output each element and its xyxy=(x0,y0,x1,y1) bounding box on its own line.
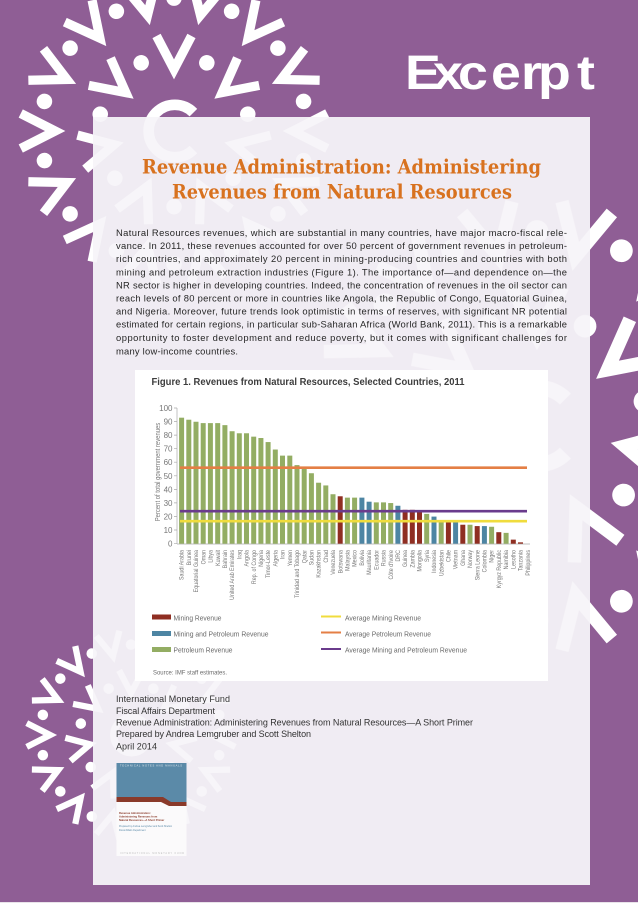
country labels: Malaysia xyxy=(344,549,352,571)
country labels: Guinea xyxy=(402,549,409,567)
bottom page edge xyxy=(0,902,638,903)
country labels: United Arab Emirates xyxy=(229,550,236,600)
country labels: Russia xyxy=(380,549,388,566)
country labels: Vietnam xyxy=(452,550,460,569)
panel: main content card xyxy=(93,117,590,885)
country labels: Mexico xyxy=(351,549,359,567)
legend: Source: IMF staff estimates. xyxy=(153,670,227,676)
country labels xyxy=(178,549,532,600)
y axis: 80 xyxy=(164,431,173,440)
chart title: Figure 1. Revenues from Natural Resources, Selected Countries, 2011 xyxy=(152,376,465,388)
bar chart xyxy=(154,404,532,600)
country labels: Philippines xyxy=(524,550,532,576)
text block: introduction paragraph: Natural Resources revenues, which are substantial in many countries, have major macro-fiscal rele- xyxy=(116,227,567,238)
book cover thumbnail xyxy=(116,763,186,856)
y axis: 30 xyxy=(164,499,173,508)
legend: Average Mining Revenue xyxy=(345,614,421,622)
book cover thumbnail: Fiscal Affairs Department xyxy=(119,829,146,832)
y axis: 50 xyxy=(164,472,173,481)
legend: Mining Revenue xyxy=(174,614,222,622)
country labels: Equatorial Guinea xyxy=(193,549,200,592)
country labels: Kazakhstan xyxy=(315,550,323,578)
y axis: Percent of total government revenues xyxy=(154,422,162,521)
book cover thumbnail: Administering Revenues from xyxy=(119,814,158,818)
legend: Average Mining and Petroleum Revenue xyxy=(345,646,467,654)
text block: introduction paragraph: reach levels of 80 percent or more in countries like Angola, the Republic of Congo, Equatorial Guinea, xyxy=(116,292,567,304)
country labels: Timor-Leste xyxy=(265,549,272,578)
country labels: Zambia xyxy=(409,549,417,568)
text block: publication details: International Monetary Fund xyxy=(116,694,230,704)
y axis: 20 xyxy=(164,512,173,522)
book cover thumbnail: Natural Resources—A Short Primer xyxy=(119,818,164,822)
country labels: Mongolia xyxy=(416,549,424,571)
country labels: Norway xyxy=(467,549,474,568)
country labels: Lesotho xyxy=(510,549,518,569)
country labels: Côte d'Ivoire xyxy=(387,549,395,580)
country labels: Chile xyxy=(445,549,453,562)
country labels: Libya xyxy=(207,549,215,563)
country labels: Ecuador xyxy=(373,550,381,570)
country labels: Angola xyxy=(243,549,251,566)
country labels: Trinidad and Tobago xyxy=(294,549,301,598)
country labels: DRC xyxy=(394,549,402,561)
country labels: Iraq xyxy=(236,550,244,559)
text block: introduction paragraph xyxy=(116,227,567,356)
book cover thumbnail: Prepared by Andrea Lemgruber and Scott Shelton xyxy=(119,825,173,828)
text block: introduction paragraph: NR sector is higher in developing countries. Indeed, the concentration of revenues in the oil sector can xyxy=(116,279,567,290)
heading: Excerpt: Excerpt xyxy=(405,46,595,99)
y axis xyxy=(154,404,530,549)
country labels: Saudi Arabia xyxy=(178,549,186,580)
average lines xyxy=(180,468,527,521)
country labels: Yemen xyxy=(286,550,294,566)
country labels: Colombia xyxy=(481,549,489,572)
text block: introduction paragraph: rich countries, and approximately 20 percent in mining-producing countries and countries with both xyxy=(116,253,567,264)
text block: introduction paragraph: estimated for certain regions, in particular sub-Saharan Africa (World Bank, 2011). This is a remarkable xyxy=(116,319,567,330)
legend: Average Petroleum Revenue xyxy=(345,630,431,638)
country labels: Niger xyxy=(488,550,496,563)
country labels: Brunei xyxy=(185,550,193,565)
text block: introduction paragraph: mining and petroleum extraction industries (Figure 1). The importance of—and dependence on—the xyxy=(116,266,567,277)
text block: publication details: Fiscal Affairs Department xyxy=(116,706,215,716)
country labels: Bahrain xyxy=(221,550,229,568)
country labels: Rep. of Congo xyxy=(250,549,258,584)
legend: Mining and Petroleum Revenue xyxy=(174,630,268,638)
text block: publication details xyxy=(116,694,473,752)
country labels: Sierra Leone xyxy=(474,549,482,580)
country labels: Kuwait xyxy=(214,550,222,566)
country labels: Venezuela xyxy=(330,549,337,575)
country labels: Syria xyxy=(423,549,431,562)
decorative wheels faint on the card xyxy=(93,117,590,838)
country labels: Nigeria xyxy=(257,549,265,567)
country labels: Namibia xyxy=(503,549,510,569)
y axis: 90 xyxy=(164,418,173,427)
country labels: Botswana xyxy=(337,549,345,573)
book cover thumbnail: Revenue Administration: xyxy=(119,811,151,815)
title: article heading: Revenues from Natural Resources xyxy=(172,180,512,204)
country labels: Algeria xyxy=(272,549,280,566)
text block: introduction paragraph: opportunity to foster development and reduce poverty, but it comes with significant challenges for xyxy=(116,332,567,343)
title: article heading xyxy=(142,154,541,204)
text block: publication details: Revenue Administration: Administering Revenues from Natural Resources—A Short Primer xyxy=(116,718,473,728)
country labels: Bolivia xyxy=(358,549,366,566)
text block: publication details: April 2014 xyxy=(116,742,157,752)
y axis: 60 xyxy=(164,458,173,467)
country labels: Kyrgyz Republic xyxy=(495,550,503,588)
text block: introduction paragraph: and Nigeria. Moreover, future trends look optimistic in terms of reserves, with significant NR potential xyxy=(116,306,567,317)
y axis: 40 xyxy=(164,485,173,494)
legend xyxy=(152,614,467,676)
title: article heading: Revenue Administration: Administering xyxy=(142,154,541,178)
country labels: Chad xyxy=(322,550,330,563)
country labels: Mauritania xyxy=(366,549,373,575)
country labels: Indonesia xyxy=(431,549,438,573)
legend: Petroleum Revenue xyxy=(174,646,232,654)
country labels: Oman xyxy=(200,550,208,564)
text block: introduction paragraph: vance. In 2011, these revenues accounted for over 50 percent of government revenues in petroleum- xyxy=(116,240,567,251)
book cover thumbnail: TECHNICAL NOTES AND MANUALS xyxy=(120,764,182,768)
panel: figure 1 chart image xyxy=(135,370,548,681)
bars: country revenues xyxy=(179,418,523,544)
y axis: 100 xyxy=(159,404,173,413)
y axis: 0 xyxy=(168,540,173,549)
country labels: Uzbekistan xyxy=(438,550,446,576)
country labels: Qatar xyxy=(301,550,309,563)
book cover thumbnail: INTERNATIONAL MONETARY FUND xyxy=(120,852,184,855)
y axis: 10 xyxy=(164,526,173,535)
country labels: Sudan xyxy=(308,550,316,565)
y axis: 70 xyxy=(164,445,173,454)
text block: introduction paragraph: many low-income countries. xyxy=(116,345,238,356)
text block: publication details: Prepared by Andrea Lemgruber and Scott Shelton xyxy=(116,729,311,739)
country labels: Tanzania xyxy=(517,549,525,571)
country labels: Iran xyxy=(279,550,287,559)
country labels: Ghana xyxy=(459,549,467,566)
